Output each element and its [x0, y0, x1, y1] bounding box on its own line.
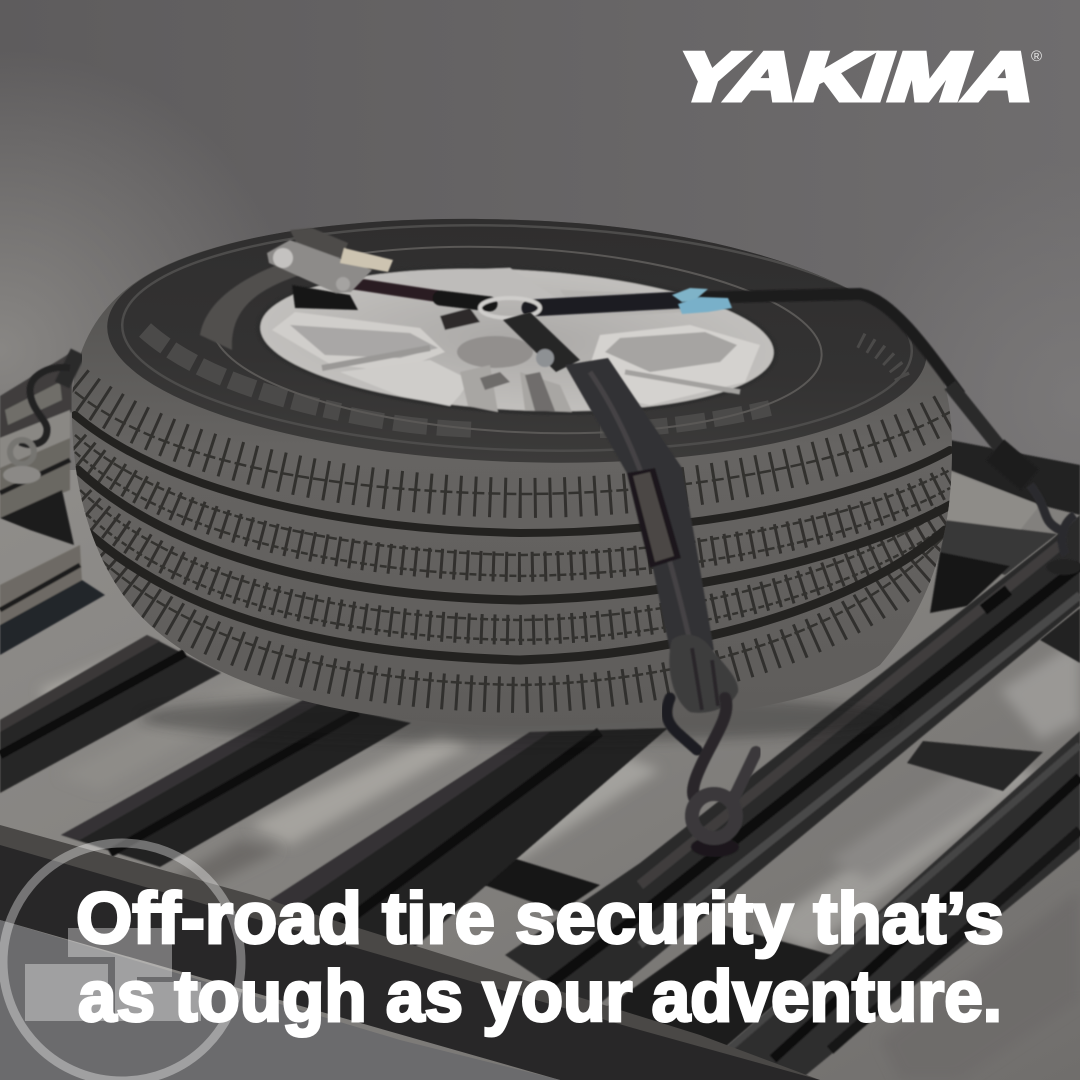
- icon: left-side strap and hook: [3, 352, 78, 484]
- vehicle roof surface: [0, 470, 1080, 1080]
- rear roof rack rails: [0, 352, 1080, 1050]
- front strap with tag and loop: [503, 312, 738, 713]
- rim-crossing ratchet straps: [350, 283, 960, 395]
- background: grey wall: [0, 0, 1080, 560]
- tire tread: [72, 236, 952, 716]
- tire shadow: [140, 694, 900, 742]
- slat left: [0, 635, 221, 793]
- wheel rim: [251, 252, 783, 428]
- slat centre-left: [61, 700, 411, 867]
- headline text: as tough as your adventure.: [78, 957, 1002, 1037]
- slat right lower: [720, 731, 1080, 1080]
- roof rack slats: [0, 515, 1080, 1080]
- icon: right-side strap and hook: [950, 385, 1080, 575]
- headline text: [76, 879, 1004, 1037]
- sidewall lettering band: [145, 330, 905, 430]
- headline text: Off-road tire security that’s: [76, 879, 1004, 959]
- strap tag: [627, 468, 681, 568]
- inner bead ring: [216, 246, 822, 434]
- icon: front S-hook and eyelet: [667, 698, 756, 857]
- icon: blue cloth tie: [672, 288, 732, 314]
- logo: Yakima: ®: [1031, 48, 1042, 65]
- icon: ratchet buckle: [267, 228, 393, 310]
- slat right main: [505, 515, 1080, 1012]
- slat centre: [270, 728, 668, 960]
- tire: [60, 204, 960, 740]
- strap loop: [669, 635, 738, 713]
- rim recesses: [272, 268, 760, 412]
- front crossbar and dark roof edge: [0, 825, 820, 1080]
- logo: Yakima: YAKIMA: [666, 39, 1048, 115]
- tire sidewall: [107, 218, 926, 463]
- watermark: circular badge with blocks: [3, 843, 241, 1080]
